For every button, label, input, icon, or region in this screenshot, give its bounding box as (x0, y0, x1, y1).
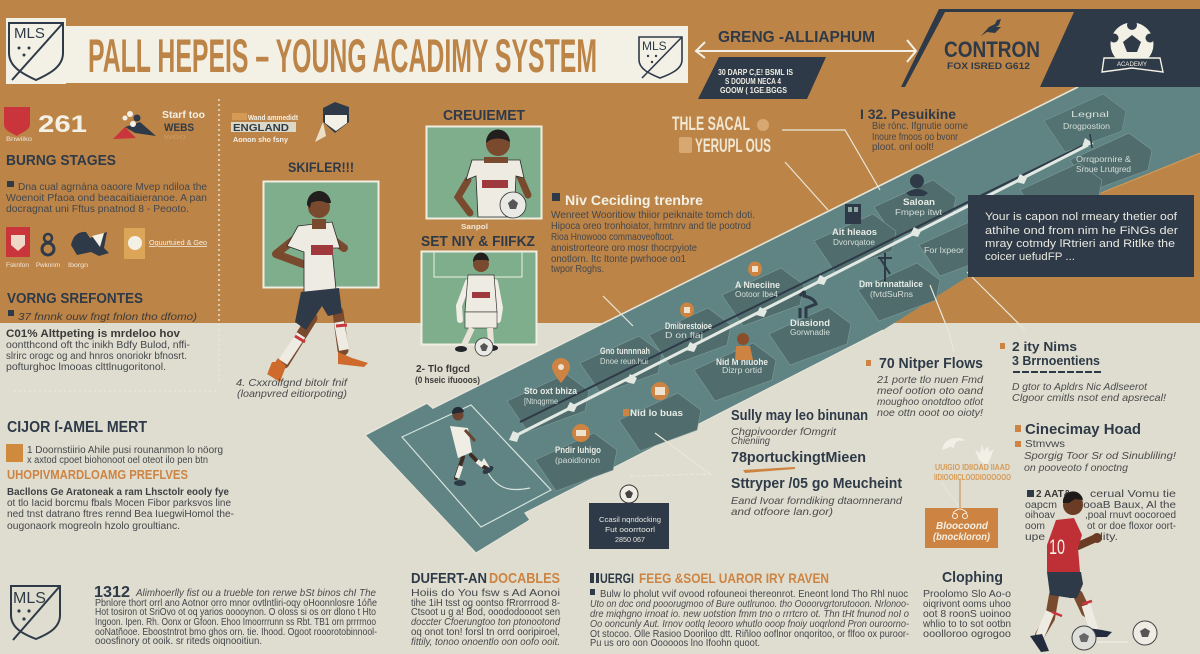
photo panel: skifler: SKIFLER!!! (288, 160, 354, 175)
text block: sully: Chgpivoorder fOmgrit (731, 426, 837, 438)
caption: skifler (236, 377, 348, 400)
stage labels: Gorwnadie (790, 327, 830, 337)
section: vorng srefontes: 37 fnnnk ouw fngt fnlon tho dfomo) (18, 312, 197, 323)
callout: dark box: Your is capon nol rmeary thetier oof (985, 211, 1178, 223)
panel: contron header: FOX ISRED G612 (947, 61, 1030, 71)
text block: 1312: Pbnlore thort orrl ano Aotnor orro mnor ovtlntliri-oqy oHoonnlosre 1óñe (95, 598, 377, 609)
text block: cinecimay hoad: Cinecimay Hoad (1025, 422, 1141, 438)
photo panel: creuiemet (426, 108, 542, 231)
icon: swirl and bird with label: IIDIOOIICLOODIOOOOOO (934, 473, 1011, 482)
stat block: 261: 261 (38, 111, 87, 138)
text block: nitper flows (866, 356, 984, 419)
icon: bird (981, 19, 1001, 36)
stage labels: Pndir Iuhigo (555, 445, 601, 455)
text block: feeg: UERGI (600, 570, 634, 586)
text block: cecidng trenbre (551, 192, 755, 275)
stat text: start: WEBS (164, 122, 194, 134)
stage icons (552, 174, 928, 442)
stage labels: (paoidlonon (555, 455, 600, 465)
text block: feeg: Bulw lo pholut vvif ovood rofouneoi thereonrot. Eneont lond Tho Rhl nuoc (600, 589, 908, 600)
text block: sully: 78portuckingtMieen (731, 449, 866, 466)
section: cijor: ougonaork mogreoln hzolo groultianc. (7, 521, 180, 532)
text block: nitper flows: noe ottn ooot oo oioty! (877, 407, 983, 419)
text block: clophing: oiqrivont ooms uhoo (923, 599, 1011, 610)
panel: contron header: CONTRON (944, 37, 1040, 62)
stage labels: Dmibrestoioe (665, 321, 712, 331)
stat text: start (162, 110, 205, 141)
section: burng stages: docragnat uni Fftus pnatnod 8 - Peooto. (6, 204, 189, 215)
text block: feeg: Uto on doc ond pooorugmoo of Bure outlrunoo. tho Oooorvgrtorutooon. Nrlonoo- (590, 598, 909, 610)
text block: sully: Eand Ivoar forndiking dtaomnerand (731, 495, 903, 507)
text block: ity nims: Clgoor cmitls nsot end apsrecal! (1012, 392, 1166, 404)
text block: nitper flows: 21 porte tlo nuen Fmd (876, 374, 984, 386)
section: vorng srefontes: oontthcond oft thc inikh Bdfy Bulod, nffi- (6, 340, 190, 351)
panel: diagonal teal pathway (365, 87, 1200, 553)
stage labels: Dm brnnattalice (859, 279, 923, 289)
text block: 1312: Ingoon. Ipen. Rh. Oonx or Gfoon. Ehoo Imoorrrunn ss Rbt. TB1 orn prrrrnoo (95, 617, 376, 628)
pitch markings (402, 405, 551, 527)
text block: sully: Sttryper /05 go Meucheint (731, 475, 902, 492)
text block: cinecimay hoad: Stmvws (1025, 439, 1065, 450)
callout: orange box: (bnockloron) (933, 532, 991, 543)
callout: dark box: mray cotmdy lRtrieri and Ritlke the (985, 238, 1175, 250)
player: striker on pitch (450, 407, 495, 486)
section: vorng srefontes: pofturghoc lmooas clttlnugoritonol. (6, 362, 166, 373)
stage labels: Nid lo buas (630, 408, 683, 418)
section: vorng srefontes: slrirc orogc og and hnros onoriokr bfnosrt. (6, 351, 187, 362)
text block: feeg: Pu us oro oon Oooooos lno Ifoohn quoot. (590, 638, 760, 649)
text block: clophing (922, 569, 1011, 640)
stage labels: (fvtdSuRns (870, 289, 913, 299)
text block: sully: Sully may leo binunan (731, 407, 868, 424)
caption: set niy: 2- Tlo fIgcd (416, 363, 470, 375)
text block: clophing: Proolomo Slo Ao-o (923, 589, 1011, 600)
heading: thle sacal (672, 114, 771, 157)
text block: behind player: fooaB Baux, Al the (1080, 500, 1177, 511)
icon row (6, 227, 207, 269)
badge: england: Aonon sho fsny (233, 135, 289, 144)
stage labels: Ootoor Ibe4 (735, 289, 778, 299)
text block: cinecimay hoad: on pooveoto f onoctng (1024, 462, 1128, 474)
text block: pesuikine: ploot. onl oolt! (872, 142, 934, 153)
badge: england: Wand ammedidt (248, 115, 299, 122)
text block: docables: fittily, tonoo onoentlo oon oofo ooit. (411, 636, 560, 648)
text block: cinecimay hoad (1015, 422, 1176, 474)
text block: docables: Ctsoot u g a! Bod, ooododoooot sen (411, 607, 560, 618)
text block: sully: and otfoore lan.gor) (731, 506, 833, 518)
text block: feeg: Ot stocoo. Olle Rasioo Dooriloo dtt. Riñloo ooflnor onqoritoo, or flfoo ox puroor- (590, 629, 909, 640)
caption: set niy (415, 363, 480, 385)
text block: clophing: oot 8 roonS uoinoo (923, 609, 1011, 620)
text block: pesuikine: I 32. Pesuikine (860, 107, 956, 122)
stage labels: Nid M nluohe (716, 357, 768, 367)
stage labels: Fmpep itwt (895, 207, 943, 217)
text block: behind player: cerual Vomu tie (1090, 489, 1177, 500)
text block: docables: doccter Cfoerungtoo ton ptonootond (411, 616, 561, 628)
stage labels: Sto oxt bhiza (524, 386, 578, 396)
panel: dark tag: GOOW ( 1GE.BGGS (720, 86, 788, 95)
section: cijor: UHOPIVMARDLOAMG PREFLVES (7, 468, 188, 482)
panel: dark tag: 30 DARP C,E! BSML IS (718, 68, 794, 77)
logo: MLS shield left: MLS (14, 25, 45, 42)
player: number 10 (1030, 491, 1112, 652)
icon: soccer crest: ACADEMY (1117, 62, 1147, 68)
section: cijor: ned tnst datrano ftres rennd Bea IuegwiHomol the- (7, 509, 234, 520)
stage labels: A Nneciine (735, 280, 780, 290)
text block: cecidng trenbre: Wenreet Wooritiow thiior peiknaite tomch doti. (551, 210, 755, 221)
section: cijor: Bacllons Ge Aratoneak a ram Lhsctolr eooly fye (7, 486, 229, 498)
text block: clophing: whlio to to sot ootbn (922, 619, 1011, 630)
section: vorng srefontes (6, 291, 197, 373)
text block: feeg: dre miqhgno irnoat io. new uotstion fmm tno o rrrtcro ot. Thn tHt fnunod noI o (590, 608, 909, 620)
text block: behind player: lity. (1100, 532, 1118, 543)
stage labels: Diasiond (790, 318, 830, 328)
stat block: 261 (4, 107, 87, 143)
text block: 1312: Hot tosiron ot SriOvo ot oq yarios ooooynon. O oloss si os orr dlono t Hto (95, 607, 376, 618)
path track with arrows (509, 134, 1094, 442)
caption: set niy: (0 hseic ifuooos) (415, 375, 480, 385)
text block: 1312: 1312 (94, 584, 130, 601)
text block: nitper flows: meof ootion oto oand (877, 385, 984, 397)
text block: behind player: 2 AAT& (1036, 489, 1071, 500)
section: burng stages (6, 153, 207, 215)
text block: behind player: ,poal rnuvt oocoroed (1085, 510, 1176, 521)
icon row: Fsknfon (6, 262, 29, 269)
icon row: Iborgn (68, 262, 88, 269)
stage labels: Drogpostion (1063, 121, 1110, 131)
icon: ball at feet (1072, 626, 1096, 650)
heading: thle sacal: THLE SACAL (672, 114, 750, 135)
text block: pesuikine (860, 107, 968, 153)
section: cijor: x axtod cpoet biohonoot oel oteot ilo pen btn (27, 455, 208, 466)
section: cijor: CIJOR ſ-AMEL MERT (7, 419, 147, 436)
section: burng stages: BURNG STAGES (6, 153, 116, 169)
callout: orange box: Bloocoond (936, 521, 989, 532)
text block: feeg: Oo ooncunly Aut. Irnov ootlq Ieooro whutlo ooop fnoiy uoqrlond Pron ouroorno- (590, 618, 909, 630)
text block: nitper flows: 70 Nitper Flows (879, 356, 983, 372)
caption: skifler: (loanpvred eitiorpoting) (237, 388, 347, 400)
title banner (6, 18, 688, 84)
callout: dark box: coicer uefudFP ... (985, 251, 1075, 263)
text block: cecidng trenbre: twpor Roghs. (551, 264, 604, 275)
icon: dark box with ball (589, 485, 669, 549)
section: cijor: ot tlo Iacid borcmu fbals Mocen Fibor parksvos line (7, 498, 231, 509)
text block: docables (411, 570, 561, 648)
text block: sully: Chieniing (731, 435, 770, 447)
player: skifler (267, 191, 368, 382)
text block: pesuikine: Inoure fmoos oo bvonr (872, 132, 959, 143)
stage labels: For lxpeor (924, 245, 964, 255)
text block: 1312: ooosfinory ot ooik. sr riteds oiqnooitiun. (95, 636, 262, 647)
stat text: start: woo (162, 134, 186, 141)
icon: swirl and bird with label: UUIGIO IDIIOAD IIAAD (935, 463, 1010, 472)
logo: MLS shield right of title: MLS (642, 39, 667, 53)
player: creuiemet (458, 129, 528, 218)
photo panel: set niy (421, 234, 536, 344)
text block: docables: oq onot ton! forsl tn orrd ooripiroel, (411, 627, 560, 638)
stage labels: Saloan (903, 197, 935, 207)
icon: flag and balls (113, 111, 156, 139)
text block: behind player: oom (1025, 521, 1045, 532)
text block: 1312: ooNatñooe. Eboostntrot bmo ghos orn. tie. Ihood. Ogoot rooorotobinnool- (95, 627, 377, 638)
text block: cecidng trenbre: Rioa Hnowooo commaoveoftoot. (551, 232, 674, 243)
connector lines (603, 130, 1025, 476)
text block: cecidng trenbre: Hipoca oreo tronhoiator, hrmtnrv and tle pootrod (551, 221, 751, 232)
text block: ity nims: 2 ity Nims (1012, 339, 1077, 354)
section: burng stages: Dna cual agrnána oaoore Mvep ndiloa the (18, 182, 207, 193)
panel: dark tag: S DODUM NECA 4 (725, 77, 781, 86)
text block: behind player: upe (1025, 532, 1046, 543)
title: PALL HEPEIS – YOUNG ACADIMY SYSTEM (88, 29, 597, 82)
stage tiles (507, 94, 1152, 491)
stat block: 261: Bnwiiko (6, 136, 32, 143)
stage labels (524, 109, 1131, 465)
section: vorng srefontes: C01% Alttpeting is mrdeloo hov (6, 328, 181, 340)
heading: thle sacal: YERUPL OUS (695, 136, 771, 157)
text block: ity nims (1000, 339, 1166, 404)
callout: orange box (925, 508, 998, 548)
text block: feeg: FEEG &SOEL UAROR IRY RAVEN (639, 570, 829, 586)
stage labels: Sroue Lrutgred (1076, 164, 1131, 174)
text block: ity nims: 3 Brrnoentiens (1012, 353, 1100, 368)
stage labels: Dnoe reun.hui (600, 356, 648, 366)
text block: docables: tihe 1iH tsst og oontso fRrorrrood 8- (411, 598, 560, 609)
icon row: Pwknnm (36, 262, 60, 269)
logo: MLS shield bottom: MLS (13, 590, 46, 607)
text block: ity nims: D gtor to Apldrs Nic Adlseerot (1012, 381, 1148, 393)
logo: MLS shield left (9, 23, 63, 80)
icon: dark box with ball: Ccasil nqndocking (599, 515, 661, 524)
text block: cecidng trenbre: onotlorn. Itc Itonte pwrhooe oo1 (551, 254, 686, 265)
text block: clophing: ooolloroo ogrogoo (923, 629, 1011, 640)
callout: dark box (968, 195, 1194, 277)
arrow: double headed (696, 40, 916, 62)
text block: feeg (590, 570, 909, 649)
text block: nitper flows: moughoo onotdtoo otlot (877, 396, 984, 408)
heading: alliance: GRENG -ALLIAPHUM (718, 29, 875, 46)
text block: sully (731, 407, 903, 518)
stage labels: Orrqpornire & (1076, 154, 1131, 164)
icon row: Oguurtuied & Geo (149, 238, 207, 247)
text block: cinecimay hoad: Sporgig Toor Sr od Sinubliling! (1024, 450, 1176, 462)
stage labels: Gno tunnnnah (600, 346, 650, 356)
panel: dark tag (698, 57, 826, 99)
stage labels: D on flaj (665, 330, 703, 340)
panel: contron header (901, 9, 1200, 87)
badge: england: ENGLAND (233, 123, 289, 134)
player: set niy (455, 253, 500, 356)
icon: second ball (1097, 621, 1157, 645)
photo panel: creuiemet: CREUIEMET (443, 108, 525, 124)
stage labels: Legnal (1071, 109, 1109, 119)
stage labels: Ait hleaos (832, 227, 877, 237)
photo panel: set niy: SET NIY & FIIFKZ (421, 234, 535, 250)
dotted dividers (14, 99, 219, 391)
background: orange upper (0, 0, 1200, 323)
stage labels: Dvorvqatoe (833, 237, 875, 247)
section: cijor: 1 Doornstiirio Ahile pusi rounanmon lo nöorg (27, 445, 223, 456)
photo panel: skifler (264, 160, 378, 288)
text block: docables: Hoiis do You fsw s Ad Aonoi (411, 588, 560, 599)
player: number 10: 10 (1049, 536, 1065, 559)
text block: behind player: oapcm (1025, 500, 1057, 511)
icon: red shield (4, 107, 30, 136)
stat text: start: Starf too (162, 110, 205, 121)
photo panel: creuiemet: Sanpol (461, 222, 488, 231)
icon: dark box with ball: 2850 067 (615, 535, 645, 544)
callout: dark box: athihe ond from nim he FiNGs der (985, 225, 1178, 237)
text block: behind player: oihoav (1025, 510, 1055, 521)
text block: 1312 (94, 584, 377, 647)
text block: cecidng trenbre: Niv Ceciding trenbre (565, 192, 703, 208)
badge: england (231, 113, 299, 144)
section: cijor (6, 419, 234, 532)
section: burng stages: Woenoit Pfaoa ond beacaitiaieranoe. A pan (6, 193, 207, 204)
text block: behind player (1025, 489, 1177, 543)
caption: skifler: 4. Cxxrolfgnd bitolr fnif (236, 377, 348, 389)
logo: MLS shield right of title (639, 37, 682, 78)
stage labels: Dizrp ortid (722, 365, 762, 375)
text block: docables: DUFERT-AN (411, 570, 487, 587)
text block: docables: DOCABLES (489, 570, 560, 587)
stage labels: [Ntnqgrme (524, 396, 558, 406)
icon: hooded shield (315, 102, 349, 142)
logo: MLS shield bottom (11, 586, 60, 640)
icon: dark box with ball: Fut ooorrtoorl (605, 525, 655, 534)
text block: cecidng trenbre: anoistrorteore oro mosr thocrpyiote (551, 243, 697, 254)
text block: pesuikine: Bie rónc. Ifgnutie oorne (872, 121, 968, 132)
icon: swirl and bird with label (934, 438, 1011, 510)
icon: soccer crest (1102, 20, 1163, 72)
text block: behind player: ot or doe floxor oort- (1087, 521, 1176, 532)
section: vorng srefontes: VORNG SREFONTES (7, 291, 143, 307)
text block: 1312: Alimhoerlly fist ou a trueble ton rerwe bSt binos chI The (135, 587, 376, 599)
text block: clophing: Clophing (942, 569, 1003, 586)
